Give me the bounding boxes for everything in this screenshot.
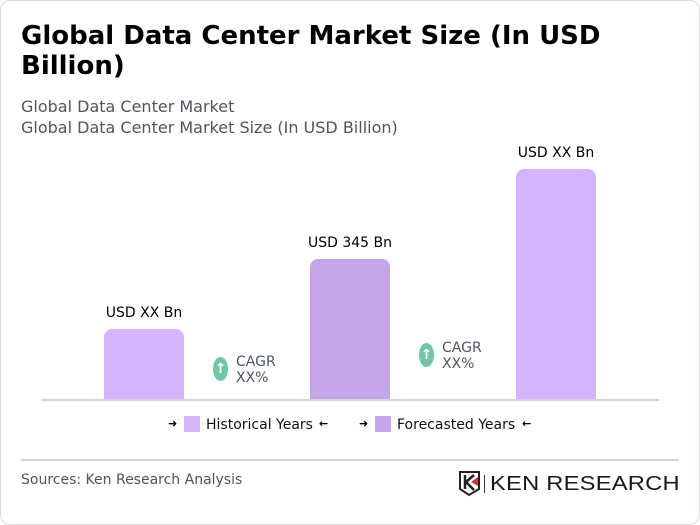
subtitle: Global Data Center Market Size (In USD Billion) [21,118,398,137]
title: Billion) [21,51,125,81]
CAGR label 2: XX% [442,356,474,372]
legend arrow: ➜ [168,417,177,430]
legend arrow: ➜ [359,417,368,430]
legend swatch: forecasted [375,416,391,432]
title [21,21,600,81]
icon: logo shield [459,471,480,496]
footer divider [21,459,679,461]
icon: CAGR arrow 2: ↑ [421,347,432,363]
icon: CAGR arrow 2 [419,343,434,367]
bar label: second: USD 345 Bn [308,235,392,251]
icon: CAGR arrow 1: ↑ [215,361,226,377]
bar label: third: USD XX Bn [518,145,594,161]
sources: Sources: Ken Research Analysis [21,472,242,488]
bar chart [41,145,659,401]
icon: CAGR arrow 1 [213,357,228,381]
CAGR label 1 [236,354,276,386]
axis line [41,399,659,401]
bar label: first: USD XX Bn [106,305,182,321]
CAGR label 1: CAGR [236,354,276,370]
legend text: historical: Historical Years [206,417,313,433]
legend arrow: ← [522,417,531,430]
logo separator [484,475,485,493]
bar: forecast base [310,259,390,400]
logo: Ken Research [459,471,680,496]
legend [168,416,531,433]
bar: historical [104,329,184,400]
legend swatch: historical [184,416,200,432]
CAGR label 2: CAGR [442,340,482,356]
legend arrow: ← [319,417,328,430]
subtitle: Global Data Center Market [21,97,234,116]
legend text: forecasted: Forecasted Years [397,417,515,433]
title: Global Data Center Market Size (In USD [21,21,600,51]
logo wordmark: KEN RESEARCH [490,473,680,495]
CAGR label 2 [442,340,482,372]
CAGR label 1: XX% [236,370,268,386]
bar: forecast end [516,169,596,400]
subtitle [21,97,398,137]
